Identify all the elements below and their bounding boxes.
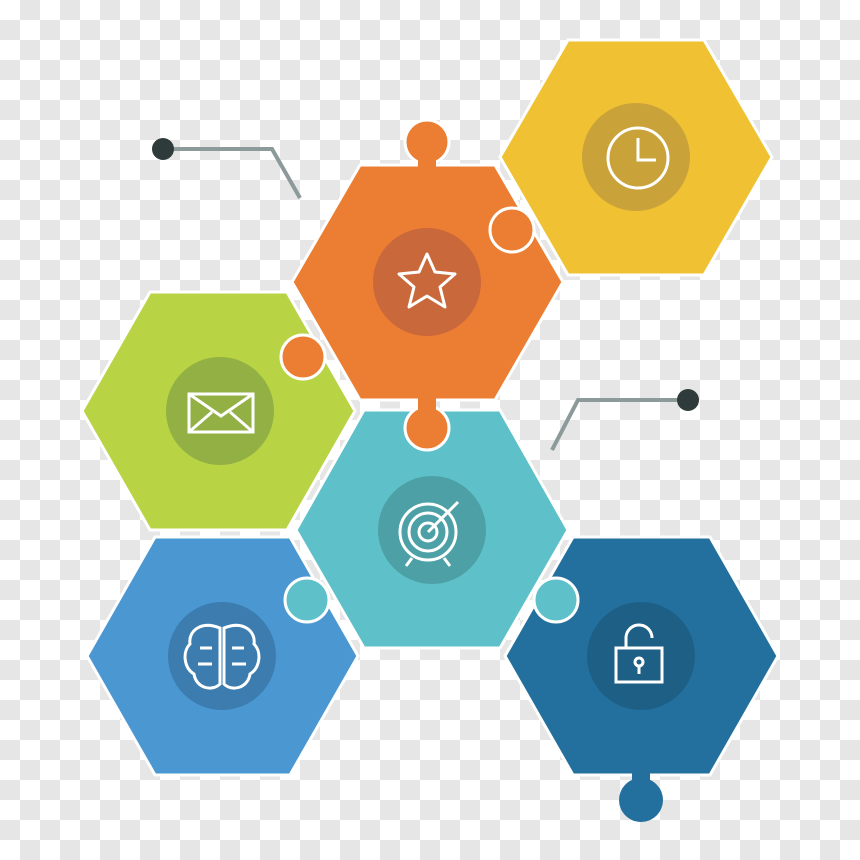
icon: clock (608, 128, 668, 188)
icon: star (399, 254, 455, 307)
hexagon: green mail (82, 292, 355, 530)
icon: brain (185, 625, 259, 688)
icon: envelope (189, 394, 253, 432)
hexagon: dark blue lock (505, 537, 778, 822)
hexagon: orange star (292, 120, 563, 400)
hexagon: blue brain (87, 537, 358, 775)
connector line left (152, 138, 300, 198)
hexagon: yellow clock (500, 40, 772, 275)
icon: padlock (616, 625, 662, 682)
connector line right (552, 389, 699, 450)
icon: target (400, 502, 458, 566)
hexagon: teal target (296, 398, 568, 648)
